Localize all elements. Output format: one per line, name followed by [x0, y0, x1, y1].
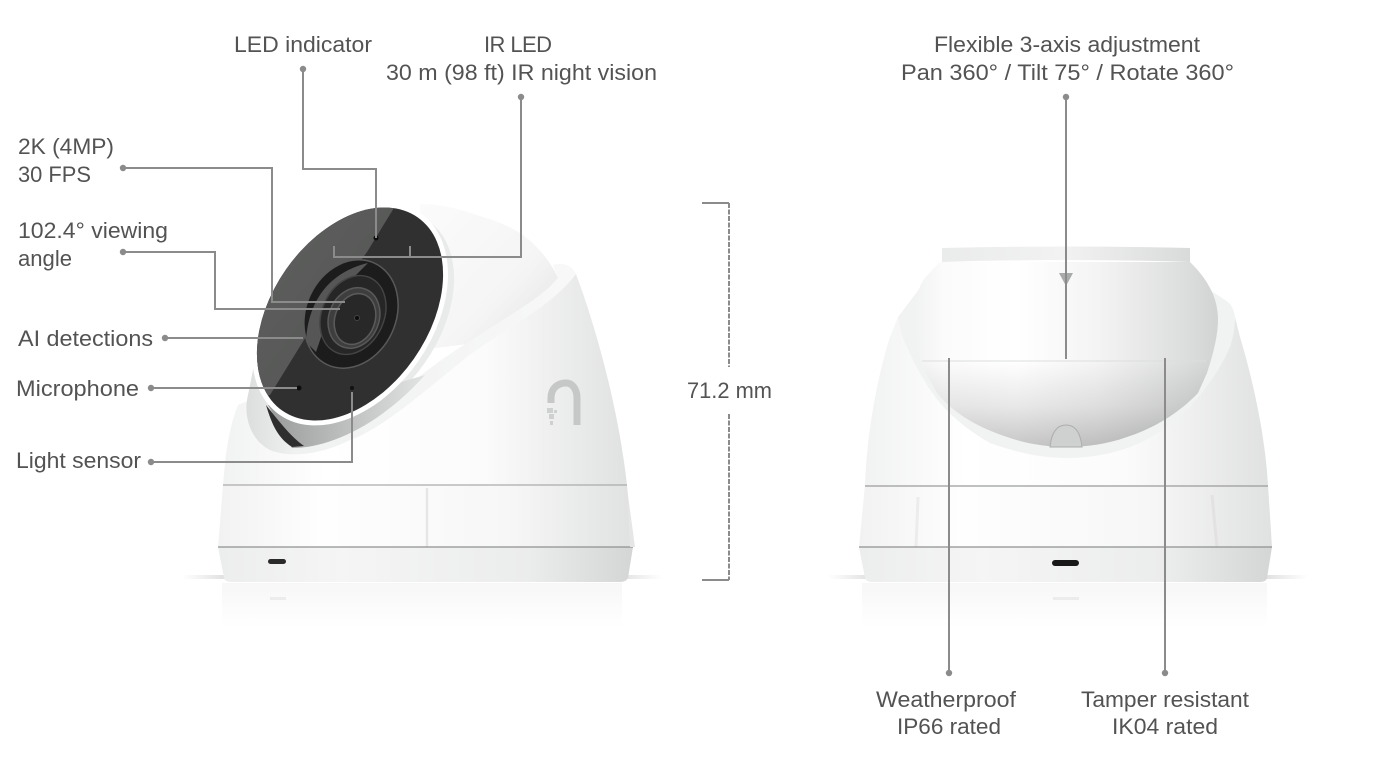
label: Flexible 3-axis adjustment [934, 32, 1200, 57]
bottom bracket [702, 579, 729, 581]
label: Light sensor [16, 448, 141, 473]
lens ring [308, 265, 398, 365]
callout: weatherproof [876, 358, 1017, 739]
base ring [218, 547, 633, 582]
base slot [1052, 560, 1079, 566]
lens inner ring [319, 280, 389, 356]
base top seam [218, 546, 633, 548]
lens glass [327, 288, 383, 350]
top cap [942, 246, 1190, 262]
label: Microphone [16, 376, 139, 401]
leader line [123, 168, 345, 302]
label: AI detections [18, 326, 153, 351]
base ring [859, 547, 1272, 582]
lens reflection [306, 263, 368, 352]
camera shell [223, 274, 627, 485]
callout: 2K resolution [18, 134, 345, 302]
reflection of base [222, 583, 622, 628]
label: IR LED [484, 32, 552, 57]
dot [1162, 670, 1168, 676]
base top seam [859, 546, 1272, 548]
dot [1063, 94, 1069, 100]
callout: light sensor [16, 392, 352, 473]
ball seam [922, 360, 1206, 362]
dot [148, 385, 154, 391]
logo pixels [547, 408, 557, 425]
dot [120, 249, 126, 255]
band top seam [865, 485, 1268, 487]
label second line: IP66 rated [897, 714, 1001, 739]
rear ball [919, 262, 1218, 446]
floor shadow [182, 575, 662, 579]
arrow marker [1059, 273, 1073, 286]
leader line [165, 337, 303, 339]
shell inner lip [898, 288, 1235, 458]
leader line [948, 358, 950, 673]
floor shadow [828, 575, 1308, 579]
middle band [218, 485, 633, 547]
label second line: IK04 rated [1112, 714, 1218, 739]
reflected slot [270, 597, 286, 600]
callout: 3-axis adjustment [901, 32, 1234, 359]
band clip right [1212, 495, 1217, 547]
face reflection [256, 208, 394, 396]
band clip notch [426, 488, 428, 548]
ball base shading [919, 262, 1218, 446]
reflected slot [1053, 597, 1079, 600]
leader line [334, 97, 521, 257]
shell opening lip [246, 264, 576, 454]
lower dashed line [728, 414, 730, 580]
band top seam [223, 484, 627, 486]
camera dome [420, 204, 558, 350]
reflection of base [862, 583, 1267, 628]
lens aperture [354, 316, 360, 320]
label: Tamper resistant [1081, 687, 1249, 712]
microphone hole [296, 386, 302, 390]
ball bump [1050, 425, 1082, 447]
callout: IR LED [334, 32, 657, 257]
right camera: rear view [840, 246, 1296, 600]
label: 71.2 mm [687, 378, 772, 403]
leader line [1164, 358, 1166, 673]
middle band [859, 485, 1272, 547]
leader line [303, 69, 376, 238]
dot [162, 335, 168, 341]
label second line: 30 m (98 ft) IR night vision [386, 60, 657, 85]
logo arch [551, 383, 577, 425]
lens outer housing [287, 244, 415, 384]
leader line [151, 387, 297, 389]
label: LED indicator [234, 32, 372, 57]
label: Weatherproof [876, 687, 1017, 712]
dot [148, 459, 154, 465]
callout: AI detections [18, 326, 303, 351]
dot [518, 94, 524, 100]
white face ring [211, 166, 489, 462]
leader line [123, 252, 340, 309]
left camera: front three-quarter view [193, 208, 650, 600]
label: 2K (4MP) [18, 134, 114, 159]
dot [300, 66, 306, 72]
top bracket [702, 202, 729, 204]
label: 102.4° viewing [18, 218, 168, 243]
ball lower shading [930, 378, 1203, 446]
leader line [1065, 97, 1067, 359]
lens [287, 244, 415, 384]
label second line: angle [18, 246, 72, 271]
band clip left [916, 497, 918, 547]
callout: viewing angle [18, 218, 340, 309]
camera shell [865, 292, 1268, 485]
label second line: Pan 360° / Tilt 75° / Rotate 360° [901, 60, 1234, 85]
leader line [151, 392, 352, 462]
callout: microphone [16, 376, 297, 401]
side tab [628, 495, 635, 547]
callout: tamper resistant [1081, 358, 1249, 739]
light sensor hole [350, 386, 354, 390]
upper dashed line [728, 203, 730, 367]
callout: LED indicator [234, 32, 376, 238]
dome band beside face [229, 177, 493, 459]
brand logo [547, 383, 577, 425]
grey shadow under face [268, 375, 425, 448]
LED indicator hole [374, 236, 378, 240]
base slot [268, 559, 286, 564]
label second line: 30 FPS [18, 162, 91, 187]
dark camera face [218, 173, 482, 455]
dark gimbal recess [266, 405, 304, 447]
dot [946, 670, 952, 676]
dot [120, 165, 126, 171]
